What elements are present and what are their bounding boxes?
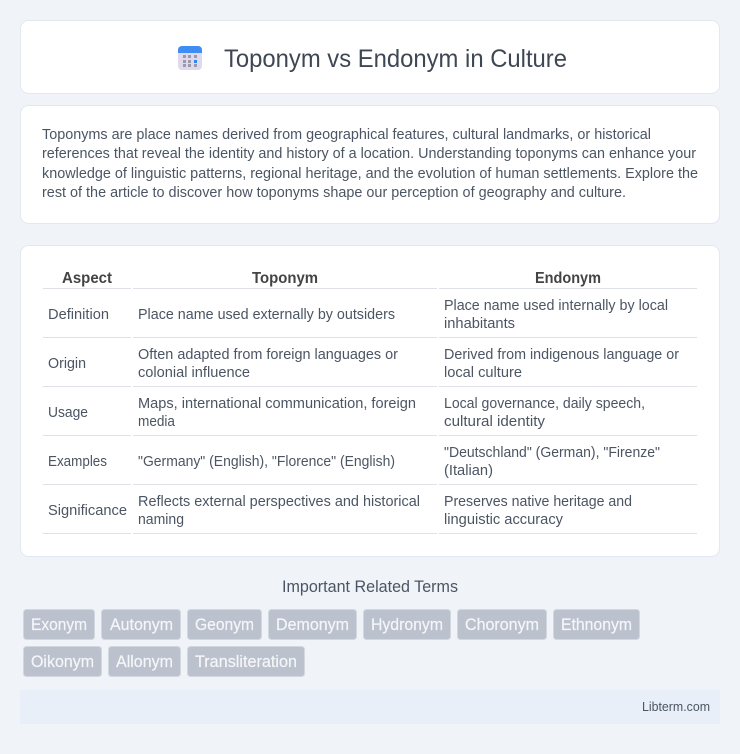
row: examples <box>48 445 660 479</box>
footer: Libterm.com <box>642 700 710 714</box>
related term chips: Transliteration <box>195 653 297 671</box>
panel: header <box>20 20 720 94</box>
panel: comparison table <box>20 246 720 556</box>
row: examples: (Italian) <box>444 463 493 479</box>
row: usage: media <box>138 414 176 430</box>
related term chips: Oikonym <box>31 653 94 671</box>
text block: introduction: references that reveal the identity and history of a location. Understanding toponyms can enhance your <box>42 145 696 162</box>
row: significance: Preserves native heritage and <box>444 494 632 510</box>
row: examples: "Germany" (English), "Florence" (English) <box>138 454 395 470</box>
row: origin: Often adapted from foreign languages or <box>138 347 398 363</box>
row: significance: linguistic accuracy <box>444 512 564 528</box>
related term chips: Autonym <box>110 616 173 634</box>
row: usage: Local governance, daily speech, <box>444 396 645 412</box>
row: definition: Place name used internally by local <box>444 298 668 314</box>
row: origin <box>48 347 679 381</box>
table header: Endonym <box>535 270 601 287</box>
related term chips: Ethnonym <box>561 616 632 634</box>
row: origin: Derived from indigenous language or <box>444 347 679 363</box>
row: origin: local culture <box>444 365 522 381</box>
table header <box>62 270 601 287</box>
related term chips <box>24 610 640 676</box>
text block: introduction: Toponyms are place names derived from geographical features, cultural landmarks, or historical <box>42 126 651 143</box>
table header: Toponym <box>252 270 318 287</box>
row: usage: cultural identity <box>444 414 546 430</box>
row: usage <box>48 396 645 430</box>
footer <box>20 690 720 724</box>
row: definition: Definition <box>48 307 109 323</box>
table header: Aspect <box>62 270 112 287</box>
title: Toponym vs Endonym in Culture <box>224 45 567 73</box>
row: significance: Reflects external perspectives and historical <box>138 494 420 510</box>
row: definition: inhabitants <box>444 316 515 332</box>
icon: calendar <box>178 46 202 70</box>
related term chips: Hydronym <box>371 616 443 634</box>
related term chips: Demonym <box>276 616 349 634</box>
row: origin: colonial influence <box>138 365 250 381</box>
related term chips: Allonym <box>116 653 173 671</box>
heading: related terms: Important Related Terms <box>282 578 458 596</box>
panel: introduction <box>20 106 720 224</box>
row: usage: Maps, international communication, foreign <box>138 396 416 412</box>
text block: introduction: rest of the article to discover how toponyms shape our perception of geography and culture. <box>42 184 626 201</box>
row: examples: Examples <box>48 454 107 470</box>
row: definition <box>48 298 668 332</box>
related term chips: Exonym <box>31 616 87 634</box>
row: definition: Place name used externally by outsiders <box>138 307 395 323</box>
row: examples: "Deutschland" (German), "Firenze" <box>444 445 660 461</box>
row: significance: Significance <box>48 503 127 519</box>
row: origin: Origin <box>48 356 86 372</box>
text block: introduction <box>42 126 698 201</box>
row: significance <box>48 494 632 528</box>
row: usage: Usage <box>48 405 88 421</box>
text block: introduction: knowledge of linguistic patterns, regional heritage, and the evolution of human settlements. Explore the <box>42 165 698 182</box>
related term chips: Geonym <box>195 616 254 634</box>
row: significance: naming <box>138 512 184 528</box>
related term chips: Choronym <box>465 616 539 634</box>
